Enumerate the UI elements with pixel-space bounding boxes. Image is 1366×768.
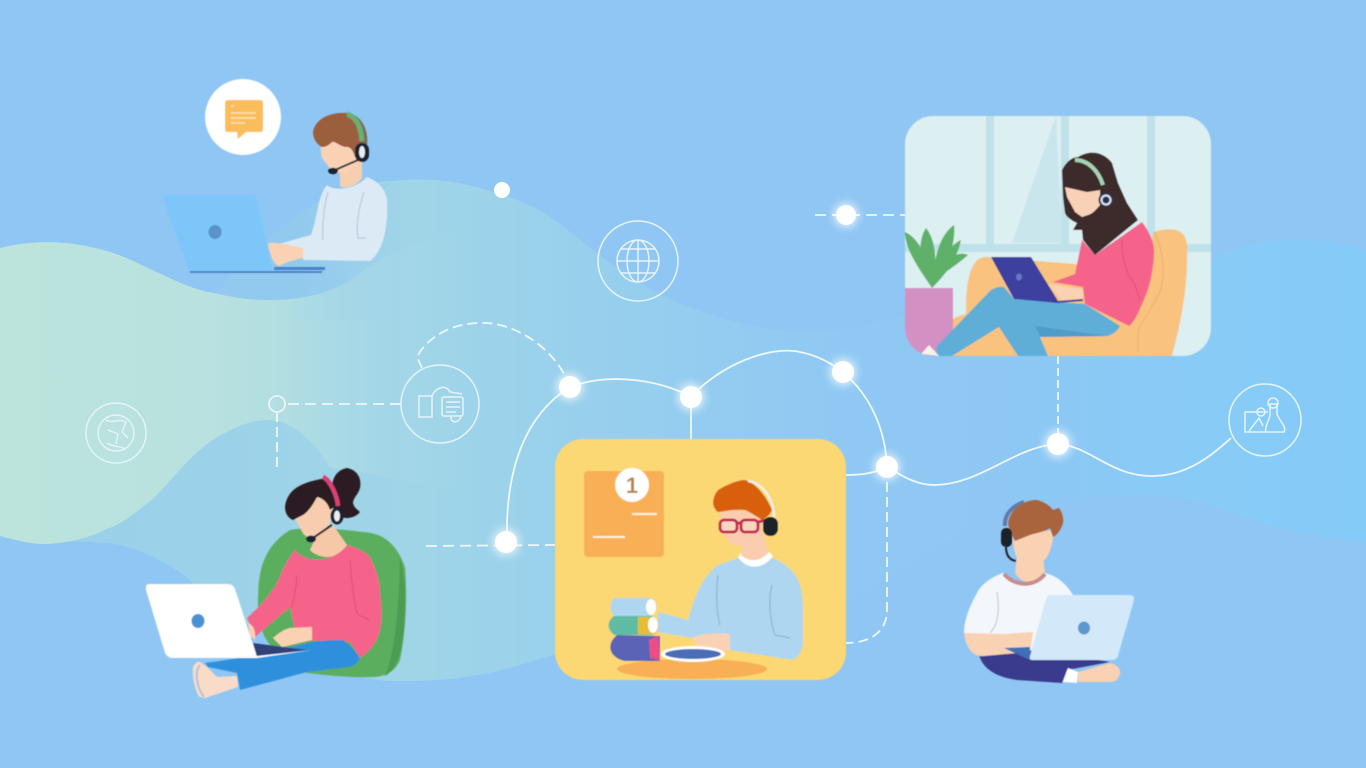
neck	[310, 525, 347, 557]
laptop screen	[164, 194, 273, 272]
foot	[1078, 663, 1120, 682]
sweater	[657, 558, 803, 660]
laptop base	[190, 271, 322, 273]
ponytail	[331, 468, 360, 518]
window frame	[905, 116, 1211, 250]
figure: boy sitting with laptop	[964, 500, 1134, 683]
face	[321, 135, 359, 174]
hollow node	[269, 396, 285, 412]
background wave: pale blue	[0, 180, 1366, 681]
neck	[340, 160, 362, 188]
laptop keyboard	[253, 643, 307, 657]
headset	[355, 143, 369, 162]
glasses	[720, 520, 766, 532]
face	[295, 497, 333, 538]
hand	[268, 243, 303, 266]
hair	[313, 113, 362, 157]
icon: device and document	[401, 365, 479, 443]
pot	[904, 288, 953, 356]
sweater	[1053, 222, 1154, 326]
book stack	[608, 598, 660, 661]
shirt fold	[990, 592, 998, 633]
hand	[693, 633, 730, 652]
legs	[205, 640, 360, 690]
panel: yellow study card	[555, 439, 846, 680]
shirt	[964, 573, 1073, 650]
laptop	[1030, 595, 1134, 660]
hair	[285, 478, 335, 520]
icon: science flask	[1229, 384, 1301, 456]
feet	[193, 662, 238, 698]
headband	[323, 477, 338, 506]
sweater	[247, 545, 382, 658]
laptop	[991, 257, 1083, 303]
background wave: mint	[0, 230, 460, 544]
background wave: shaded bay	[205, 181, 400, 320]
number note: 1	[626, 473, 638, 498]
plate	[661, 646, 725, 662]
figure: man with headset at laptop	[164, 79, 387, 272]
collar	[738, 552, 773, 567]
hands	[248, 623, 312, 647]
plant	[905, 225, 968, 288]
connection lines	[277, 215, 1231, 643]
arm	[964, 632, 1033, 656]
glowing nodes	[493, 182, 1071, 555]
number note	[584, 468, 664, 557]
figure: woman with ponytail on green chair	[146, 468, 406, 698]
legs	[936, 287, 1120, 356]
headset	[1001, 528, 1012, 547]
keyboard	[1004, 647, 1030, 660]
panel: woman on sofa in window scene	[904, 116, 1211, 356]
face	[1013, 530, 1054, 565]
headband	[1005, 502, 1024, 526]
sofa	[935, 229, 1187, 356]
hair	[713, 480, 772, 520]
hair back	[347, 113, 367, 150]
icon: globe	[598, 221, 678, 301]
headset	[330, 508, 344, 524]
headband	[347, 114, 362, 141]
collar	[1004, 574, 1045, 584]
hair	[1062, 153, 1138, 255]
hair	[1008, 500, 1063, 541]
curtain	[1012, 116, 1062, 243]
table	[617, 659, 767, 679]
hand	[1048, 284, 1083, 300]
headset	[748, 481, 774, 518]
shoe	[921, 345, 939, 356]
pants	[979, 650, 1110, 683]
green chair	[258, 528, 406, 677]
speech bubble icon	[205, 79, 281, 155]
laptop screen	[146, 584, 257, 657]
icon: world badge	[86, 403, 146, 463]
sweater	[273, 177, 387, 261]
neck	[1015, 556, 1045, 582]
headset	[1100, 194, 1112, 206]
neck	[741, 530, 768, 560]
face	[720, 508, 763, 546]
face	[1065, 187, 1100, 217]
headband	[1075, 160, 1103, 185]
fringe	[1066, 186, 1100, 192]
